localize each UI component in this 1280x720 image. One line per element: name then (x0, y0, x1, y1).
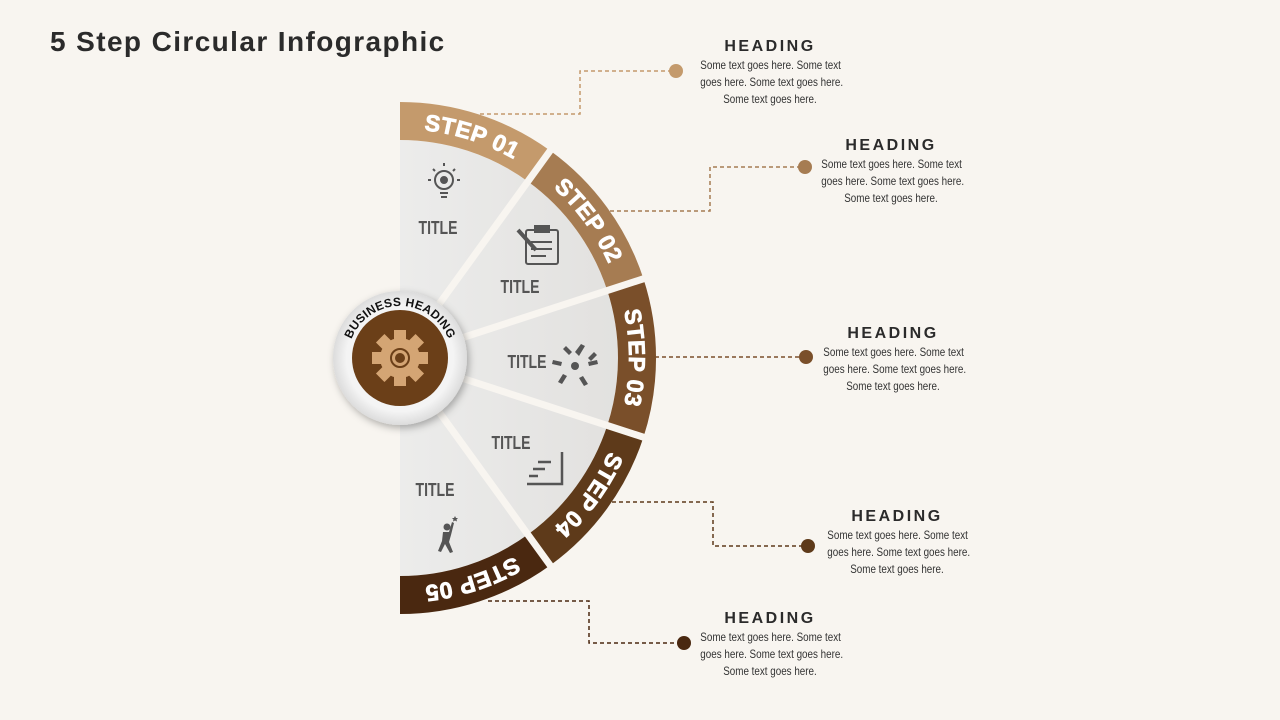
wedge titles (416, 218, 546, 500)
ring segments (400, 102, 656, 614)
callout 3 (823, 325, 966, 393)
callout 2: HEADING (845, 137, 937, 154)
callout 2: goes here. Some text goes here. (821, 174, 964, 188)
callout 1: Some text goes here. Some text (700, 58, 841, 72)
callout 3: Some text goes here. Some text (823, 345, 964, 359)
callout 4: HEADING (851, 508, 943, 525)
wedge titles: TITLE (418, 218, 458, 238)
title: 5 Step Circular Infographic (50, 26, 446, 57)
callout 1 (700, 38, 843, 106)
callout 5: goes here. Some text goes here. (700, 647, 843, 661)
callout 3: HEADING (847, 325, 939, 342)
wedge titles: TITLE (500, 277, 540, 297)
business heading: BUSINESS HEADING (344, 298, 455, 338)
callout 4: Some text goes here. Some text (827, 528, 968, 542)
wedge titles: TITLE (416, 480, 454, 500)
callout 3: goes here. Some text goes here. (823, 362, 966, 376)
step labels: STEP 05 (426, 558, 520, 602)
center hub (330, 290, 474, 432)
icon: person reaching star (438, 516, 458, 553)
callout 1: HEADING (724, 38, 816, 55)
icon: stairs (527, 452, 562, 484)
step labels: STEP 04 (555, 453, 622, 538)
callout dots (669, 64, 815, 650)
callout connectors (480, 71, 808, 643)
step labels: STEP 03 (624, 309, 646, 406)
callout 5: HEADING (724, 610, 816, 627)
icon: clipboard (518, 226, 558, 264)
icon: gear (372, 330, 428, 386)
gray semicircle wedges (400, 140, 618, 576)
callout 4: Some text goes here. (850, 562, 944, 576)
callout 2 (821, 137, 964, 205)
wedge titles: TITLE (492, 433, 530, 453)
step labels (424, 114, 646, 602)
callout 5: Some text goes here. Some text (700, 630, 841, 644)
callout 4: goes here. Some text goes here. (827, 545, 970, 559)
icon: hands (552, 344, 598, 386)
callout 1: Some text goes here. (723, 92, 817, 106)
step labels: STEP 01 (424, 114, 518, 160)
step labels: STEP 02 (556, 178, 622, 264)
callout 5 (700, 610, 843, 678)
wedge titles: TITLE (508, 352, 546, 372)
callout 5: Some text goes here. (723, 664, 817, 678)
callout 4 (827, 508, 970, 576)
callout 2: Some text goes here. Some text (821, 157, 962, 171)
callout 1: goes here. Some text goes here. (700, 75, 843, 89)
callout 2: Some text goes here. (844, 191, 938, 205)
icon: lightbulb (428, 163, 460, 197)
callout 3: Some text goes here. (846, 379, 940, 393)
